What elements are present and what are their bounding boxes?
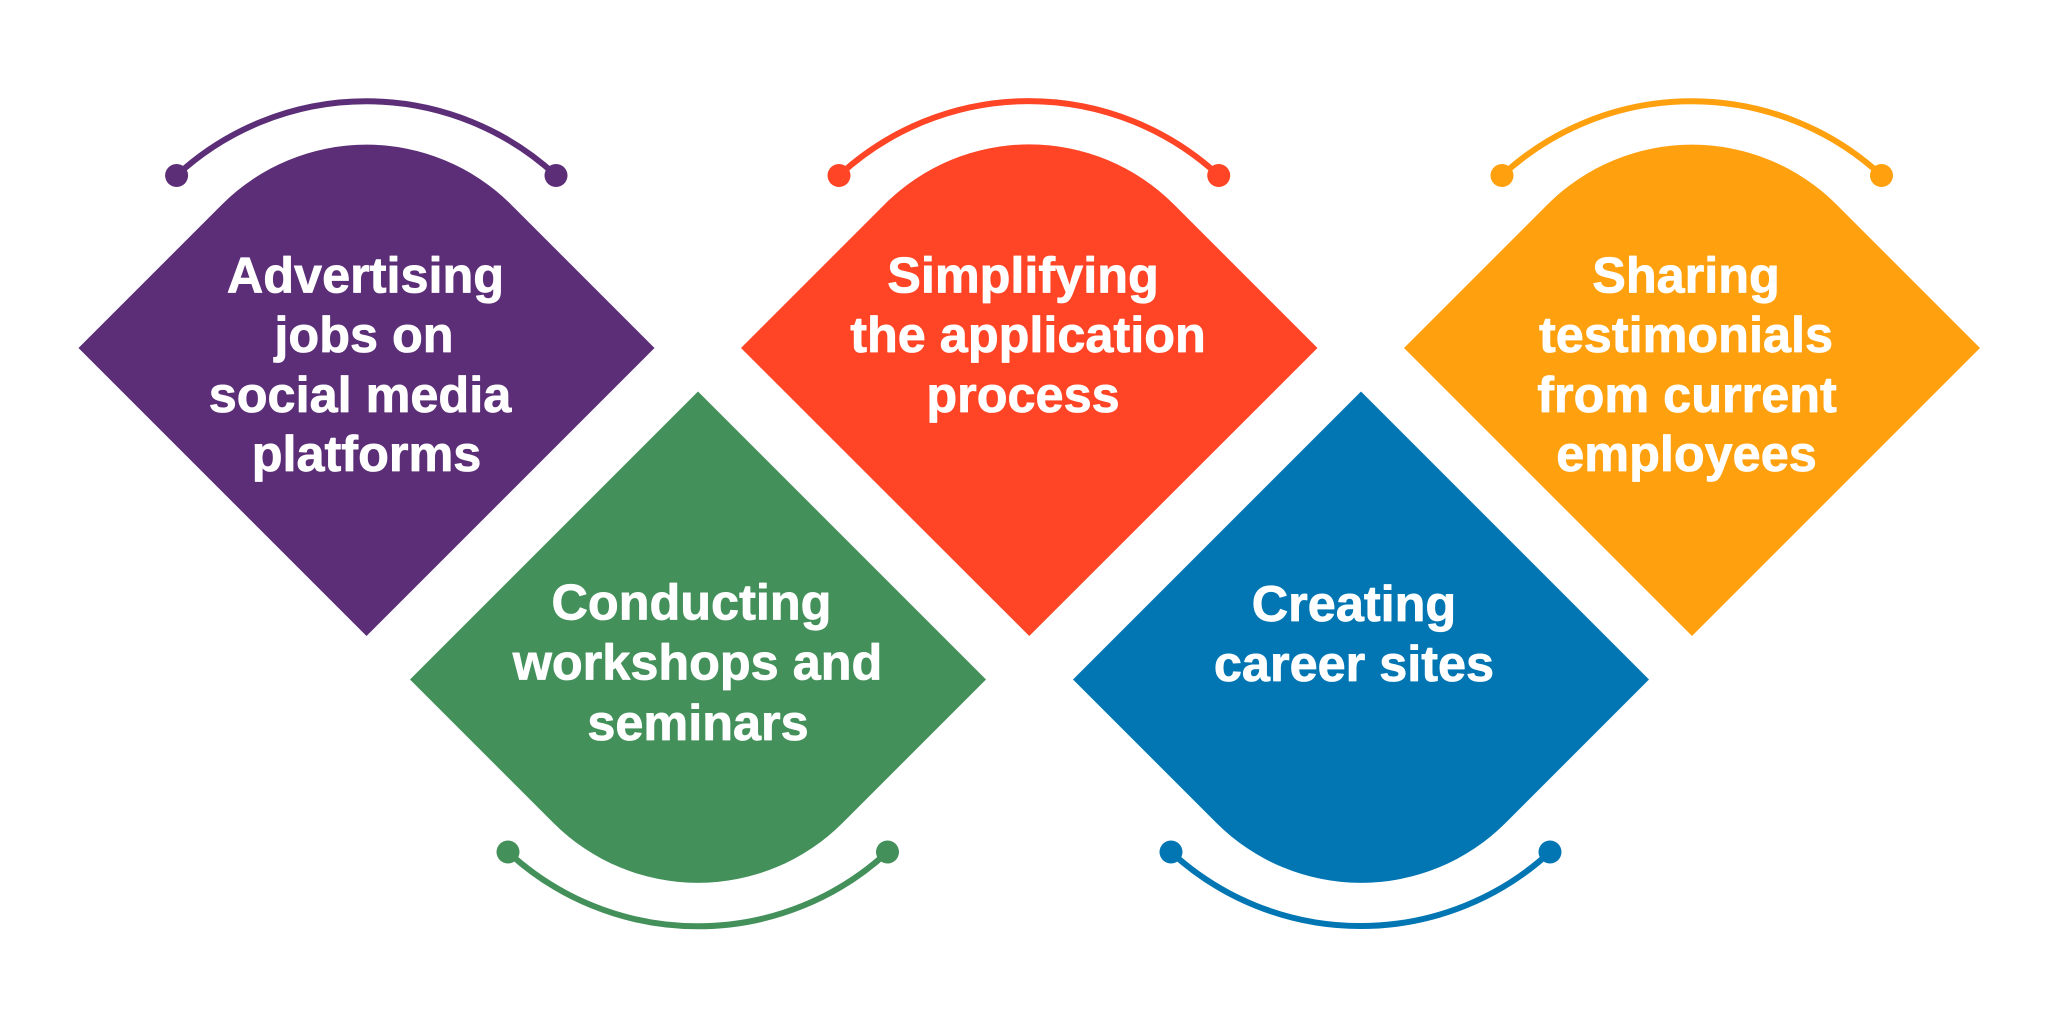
text: advertising bbox=[209, 246, 512, 482]
purple arc with end dots bbox=[165, 101, 568, 187]
red arc with end dots bbox=[828, 101, 1230, 187]
orange arc with end dots bbox=[1490, 101, 1893, 187]
red diamond shape bbox=[741, 144, 1318, 636]
text: conducting: seminars bbox=[587, 694, 809, 751]
panel: simplifying the application process bbox=[741, 101, 1318, 636]
text: simplifying: process bbox=[926, 366, 1120, 423]
text: sharing: Sharing bbox=[1592, 246, 1780, 304]
text: advertising: social media bbox=[209, 366, 512, 423]
panel: advertising jobs on social media platforms bbox=[78, 101, 654, 636]
text: simplifying: the application bbox=[850, 306, 1206, 363]
text: conducting bbox=[512, 574, 882, 751]
text: creating bbox=[1214, 575, 1494, 692]
text: creating: Creating bbox=[1252, 575, 1456, 632]
blue arc with end dots bbox=[1160, 840, 1562, 926]
text: simplifying bbox=[850, 246, 1206, 423]
text: advertising: Advertising bbox=[227, 246, 504, 304]
panel: conducting workshops and seminars bbox=[410, 392, 986, 926]
text: sharing: employees bbox=[1556, 425, 1817, 482]
text: sharing: testimonials bbox=[1539, 306, 1833, 363]
text: sharing: from current bbox=[1537, 366, 1837, 423]
purple diamond shape bbox=[78, 145, 654, 636]
green diamond shape bbox=[410, 392, 986, 883]
text: advertising: jobs on bbox=[273, 306, 454, 363]
text: simplifying: Simplifying bbox=[887, 246, 1159, 304]
blue diamond shape bbox=[1073, 392, 1649, 883]
panel: sharing testimonials from current employees bbox=[1404, 101, 1980, 636]
green arc with end dots bbox=[496, 840, 899, 926]
text: conducting: workshops and bbox=[512, 634, 882, 690]
text: advertising: platforms bbox=[252, 425, 481, 482]
text: creating: career sites bbox=[1214, 635, 1494, 692]
text: conducting: Conducting bbox=[552, 574, 831, 630]
orange diamond shape bbox=[1404, 145, 1980, 636]
text: sharing bbox=[1537, 246, 1837, 482]
panel: creating career sites bbox=[1073, 392, 1649, 926]
